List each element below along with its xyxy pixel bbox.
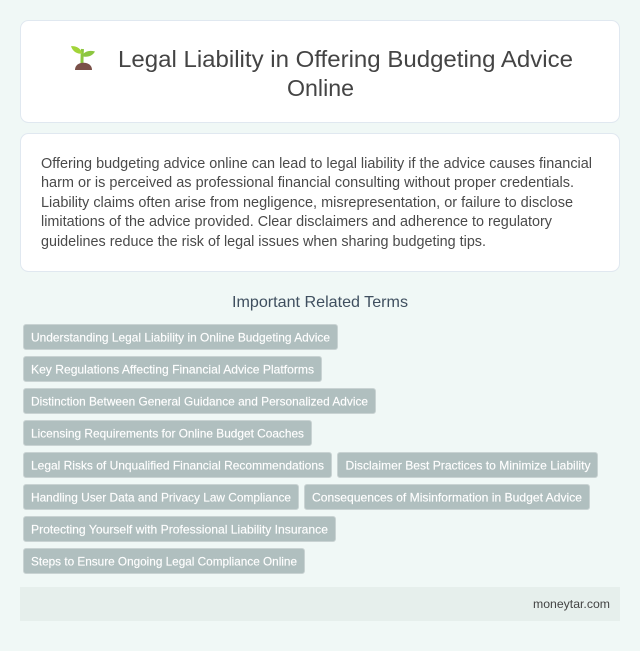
tag: Disclaimer Best Practices to Minimize Liability [346,458,590,472]
panel: title card [20,20,620,122]
footer [20,587,620,621]
tag [304,484,590,510]
panel: description [20,134,620,272]
tag: Handling User Data and Privacy Law Compliance [31,490,291,504]
footer: moneytar.com [533,597,610,611]
tag: Key Regulations Affecting Financial Advice Platforms [31,362,314,376]
tag: Steps to Ensure Ongoing Legal Compliance Online [31,554,297,568]
tag [24,356,322,382]
tag [24,388,376,414]
title [118,46,573,101]
icon: sprout [71,46,95,70]
text block: description [41,156,592,250]
tag [24,484,298,510]
tag [24,420,312,446]
tag list [24,324,598,574]
text block: description: harm or is perceived as professional financial consulting without proper credentials. [41,175,574,191]
tag: Legal Risks of Unqualified Financial Recommendations [31,458,324,472]
tag: Licensing Requirements for Online Budget Coaches [31,426,304,440]
text block: description: limitations of the advice provided. Clear disclaimers and adherence to regulatory [41,214,553,230]
heading: related terms: Important Related Terms [232,294,408,311]
tag: Consequences of Misinformation in Budget Advice [312,490,582,504]
tag [338,452,598,478]
tag [24,516,336,542]
text block: description: guidelines reduce the risk of legal issues when sharing budgeting tips. [41,234,486,250]
text block: description: Offering budgeting advice online can lead to legal liability if the advice causes financial [41,156,592,172]
tag: Protecting Yourself with Professional Liability Insurance [31,522,328,536]
text block: description: Liability claims often arise from negligence, misrepresentation, or failure to disclose [41,195,573,211]
tag [24,548,304,574]
tag: Understanding Legal Liability in Online Budgeting Advice [31,330,330,344]
tag: Distinction Between General Guidance and Personalized Advice [31,394,368,408]
tag [24,452,332,478]
tag [24,324,338,350]
title: Online [287,75,354,101]
title: Legal Liability in Offering Budgeting Advice [118,46,573,72]
